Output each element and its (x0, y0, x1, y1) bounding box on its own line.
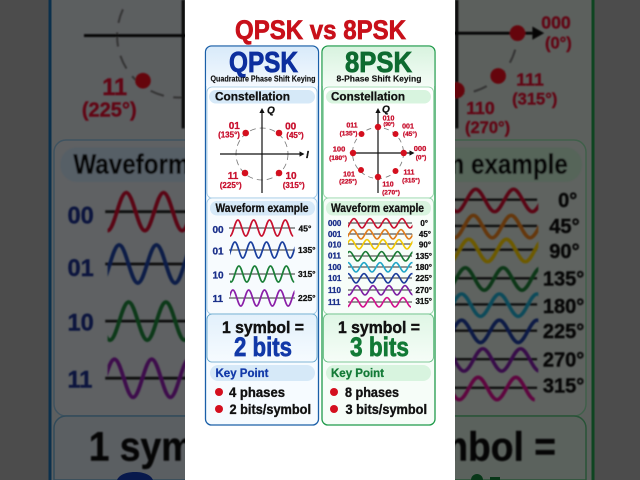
blurred enlarged background: (225°) (82, 99, 137, 121)
QPSK symbol panel (207, 314, 317, 362)
blurred enlarged background: 1 symbol = (362, 424, 556, 469)
8PSK waveform panel: 100 (328, 263, 342, 272)
QPSK waveform panel: 45° (298, 224, 312, 234)
QPSK constellation panel (207, 87, 317, 198)
QPSK waveform panel: 315° (298, 269, 316, 279)
QPSK waveform panel: 00 (212, 225, 224, 236)
blurred enlarged background: Waveform example (73, 148, 293, 180)
QPSK constellation diagram: I (306, 150, 309, 161)
8PSK waveforms (348, 218, 412, 308)
blurred enlarged background: (270°) (465, 118, 510, 137)
8PSK key point (326, 365, 431, 417)
QPSK symbol panel: 2 bits (234, 332, 292, 362)
blurred enlarged background: 01 (67, 256, 94, 282)
QPSK constellation diagram: (135°) (218, 130, 240, 140)
blurred enlarged background: 315° (543, 375, 584, 398)
QPSK constellation diagram: 10 (285, 171, 297, 182)
blurred enlarged background: 180° (543, 296, 584, 318)
QPSK constellation diagram (218, 106, 309, 193)
8PSK waveform panel: 0° (420, 219, 428, 228)
blurred enlarged background: 225° (543, 321, 584, 343)
8PSK constellation diagram: (315°) (402, 176, 420, 184)
blurred enlarged background: 111 (516, 69, 544, 90)
8PSK constellation panel: Constellation (331, 90, 405, 104)
8PSK constellation diagram: (45°) (403, 130, 417, 138)
8PSK constellation diagram: 111 (404, 170, 415, 176)
8PSK waveform panel: 135° (415, 252, 432, 261)
QPSK key point: Key Point (216, 366, 269, 380)
QPSK waveform panel: Waveform example (216, 203, 308, 215)
8PSK constellation diagram: 110 (382, 182, 394, 188)
8PSK constellation diagram: (270°) (382, 188, 400, 196)
8PSK waveform panel: 001 (328, 230, 342, 239)
8PSK waveform panel: 225° (415, 274, 432, 283)
8PSK waveform panel: 011 (328, 252, 341, 260)
8PSK header: 8PSK (345, 47, 412, 79)
8PSK waveform panel: 90° (419, 240, 431, 250)
8PSK key point: Key Point (331, 366, 384, 380)
QPSK waveform panel: 01 (212, 246, 224, 258)
8PSK waveform panel: 111 (328, 298, 341, 307)
QPSK waveforms (230, 219, 294, 307)
8PSK waveform panel: 010 (328, 240, 342, 250)
QPSK key point: 2 bits/symbol (230, 401, 311, 417)
8PSK waveform panel (324, 198, 434, 314)
QPSK waveform panel: 10 (212, 270, 224, 282)
QPSK constellation panel: Constellation (215, 90, 290, 104)
8PSK constellation diagram (329, 104, 426, 196)
blurred enlarged background: (0°) (545, 34, 572, 53)
QPSK constellation diagram: 11 (228, 171, 239, 182)
QPSK constellation diagram: 00 (285, 122, 297, 132)
panel: 8PSK (322, 46, 435, 425)
QPSK header (206, 47, 318, 86)
8PSK symbol panel (324, 314, 434, 362)
QPSK waveform panel: 11 (212, 294, 224, 305)
blurred enlarged background: 11 (102, 75, 127, 101)
blurred enlarged background: 000 (541, 12, 571, 32)
blurred enlarged background: Waveform example (348, 148, 568, 180)
QPSK header: QPSK (229, 47, 298, 79)
8PSK waveform panel: 315° (415, 297, 432, 306)
8PSK waveform panel: Waveform example (331, 203, 424, 215)
QPSK waveform panel (207, 198, 317, 314)
8PSK waveform panel: 110 (328, 286, 341, 295)
QPSK symbol panel: 1 symbol = (222, 318, 304, 337)
blurred enlarged background: 110 (466, 98, 495, 118)
8PSK key point: 8 phases (345, 384, 399, 400)
8PSK waveform panel: 000 (328, 219, 342, 228)
8PSK header: 8-Phase Shift Keying (336, 74, 422, 84)
8PSK constellation diagram: 101 (343, 172, 355, 178)
blurred enlarged background: 11 (67, 368, 92, 394)
8PSK constellation diagram: 011 (346, 122, 358, 130)
title: QPSK vs 8PSK (235, 15, 406, 45)
8PSK symbol panel: 3 bits (350, 332, 409, 362)
8PSK constellation diagram: (135°) (340, 130, 357, 138)
8PSK waveform panel: 45° (419, 230, 431, 239)
8PSK key point: 3 bits/symbol (346, 401, 427, 417)
QPSK constellation diagram: (225°) (220, 181, 242, 190)
8PSK symbol panel: 1 symbol = (338, 318, 420, 337)
QPSK constellation diagram: 01 (229, 121, 240, 132)
blurred enlarged background: 45° (549, 216, 580, 238)
blurred enlarged background: 1 symbol = (89, 424, 282, 469)
QPSK header: Quadrature Phase Shift Keying (210, 74, 316, 84)
blurred enlarged background: 0° (558, 190, 577, 212)
QPSK key point (210, 365, 315, 417)
blurred enlarged background: 00 (67, 203, 94, 230)
8PSK constellation diagram: (225°) (339, 178, 357, 186)
QPSK constellation diagram: (45°) (286, 131, 304, 140)
8PSK constellation diagram: 100 (333, 144, 345, 154)
QPSK waveform panel: 135° (298, 245, 316, 255)
8PSK constellation diagram: (90°) (384, 122, 395, 128)
QPSK waveform panel: 225° (298, 293, 316, 303)
white center column (185, 0, 455, 480)
panel: QPSK (206, 46, 318, 425)
QPSK constellation diagram: (315°) (283, 181, 305, 190)
8PSK waveform panel: 270° (415, 286, 432, 295)
blurred enlarged background: (315°) (512, 89, 557, 109)
8PSK waveform panel: 101 (328, 274, 342, 283)
8PSK constellation diagram: 001 (402, 124, 414, 130)
QPSK constellation diagram: Q (267, 106, 275, 116)
8PSK constellation diagram: Q (382, 104, 390, 116)
8PSK constellation diagram: (0°) (416, 154, 426, 162)
blurred enlarged background: 90° (549, 241, 580, 263)
blurred enlarged background: 10 (67, 311, 94, 337)
QPSK key point: 4 phases (229, 384, 285, 400)
8PSK constellation diagram: 010 (383, 116, 394, 122)
8PSK constellation diagram: (180°) (329, 154, 347, 162)
8PSK waveform panel: 180° (415, 263, 432, 272)
8PSK constellation panel (324, 87, 434, 198)
8PSK constellation diagram: 000 (414, 144, 426, 153)
blurred enlarged background: 135° (543, 268, 584, 290)
blurred enlarged background: 270° (543, 349, 584, 371)
8PSK header (323, 47, 434, 86)
